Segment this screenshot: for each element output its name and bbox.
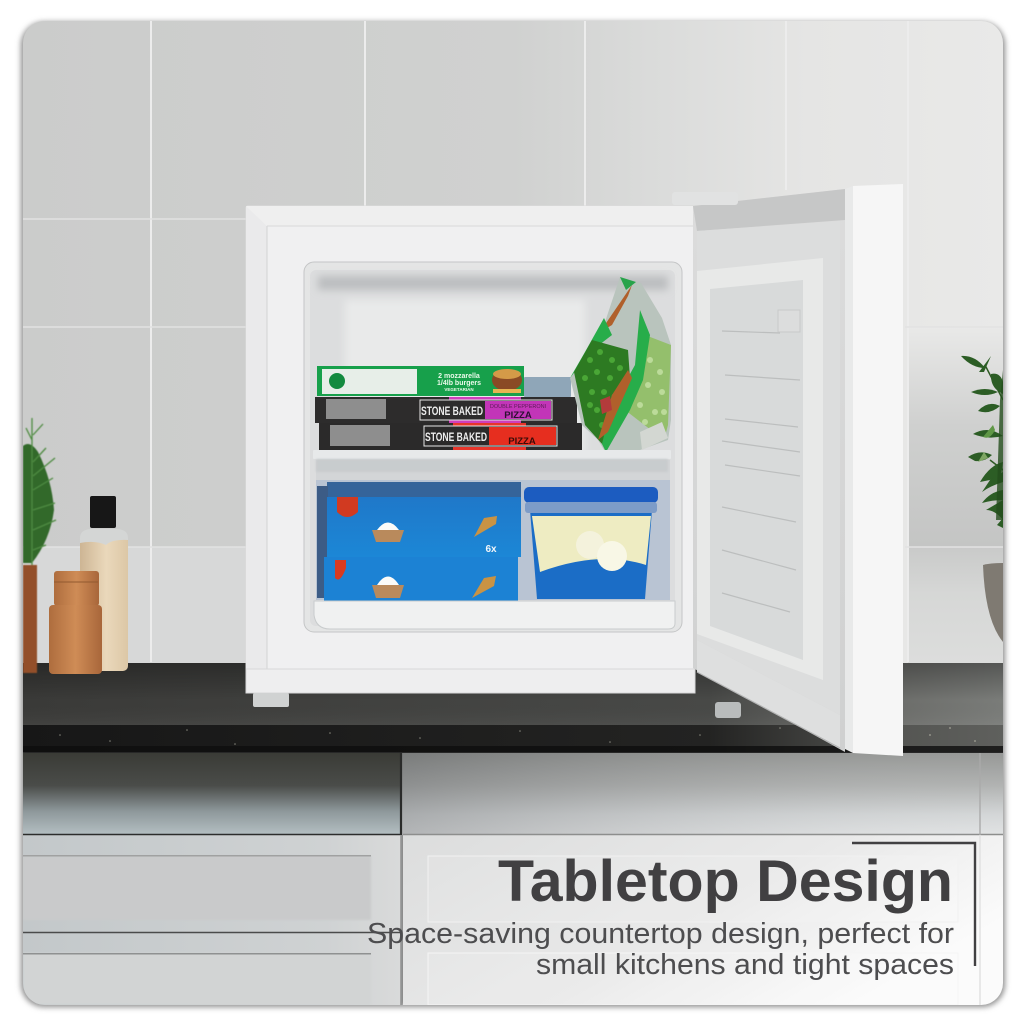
pizza box bottom: PIZZA [508, 436, 536, 447]
bottle [80, 496, 128, 671]
pizza box bottom: STONE BAKED [425, 430, 487, 444]
open door [672, 184, 903, 756]
wooden canisters [49, 571, 102, 674]
blue box lower [324, 557, 518, 601]
burger box [317, 366, 524, 396]
pizza box bottom [319, 423, 582, 450]
drawer lip [314, 601, 675, 629]
back foot [715, 702, 741, 718]
frame top edge [246, 206, 693, 207]
upper drawer fronts [402, 753, 1003, 835]
blue box upper: 6x [485, 544, 497, 555]
bracket accent [852, 843, 975, 966]
burger box: VEGETARIAN [444, 387, 474, 392]
kitchen cabinets [23, 753, 1003, 1005]
frame bottom strip [246, 669, 695, 693]
right plant in pot [961, 356, 1003, 642]
burger box: 1/4lb burgers [437, 380, 481, 387]
left potted rosemary [23, 418, 56, 673]
burger box: 2 mozzarella [438, 373, 480, 380]
cavity [304, 262, 682, 632]
foot [253, 693, 289, 707]
subtitle: small kitchens and tight spaces [536, 949, 954, 981]
subtitle [367, 918, 954, 981]
freezer body [246, 206, 695, 707]
ice cream tub [524, 487, 658, 599]
title: Tabletop Design [498, 849, 953, 914]
lower drawer fronts [23, 835, 401, 1005]
pizza box top [315, 397, 577, 423]
pizza box top: DOUBLE PEPPERONI [490, 404, 547, 410]
door front edge [853, 184, 903, 756]
pizza box top: STONE BAKED [421, 404, 483, 418]
pizza box top: PIZZA [504, 410, 532, 421]
subtitle: Space-saving countertop design, perfect for [367, 918, 954, 950]
countertop [23, 663, 1003, 753]
tiled wall [23, 21, 1003, 666]
door hinge [702, 201, 738, 205]
blue box upper [317, 482, 521, 598]
frame left side [246, 206, 247, 668]
small box behind [524, 377, 571, 397]
shelf [313, 450, 671, 472]
bag of peas [570, 277, 671, 453]
